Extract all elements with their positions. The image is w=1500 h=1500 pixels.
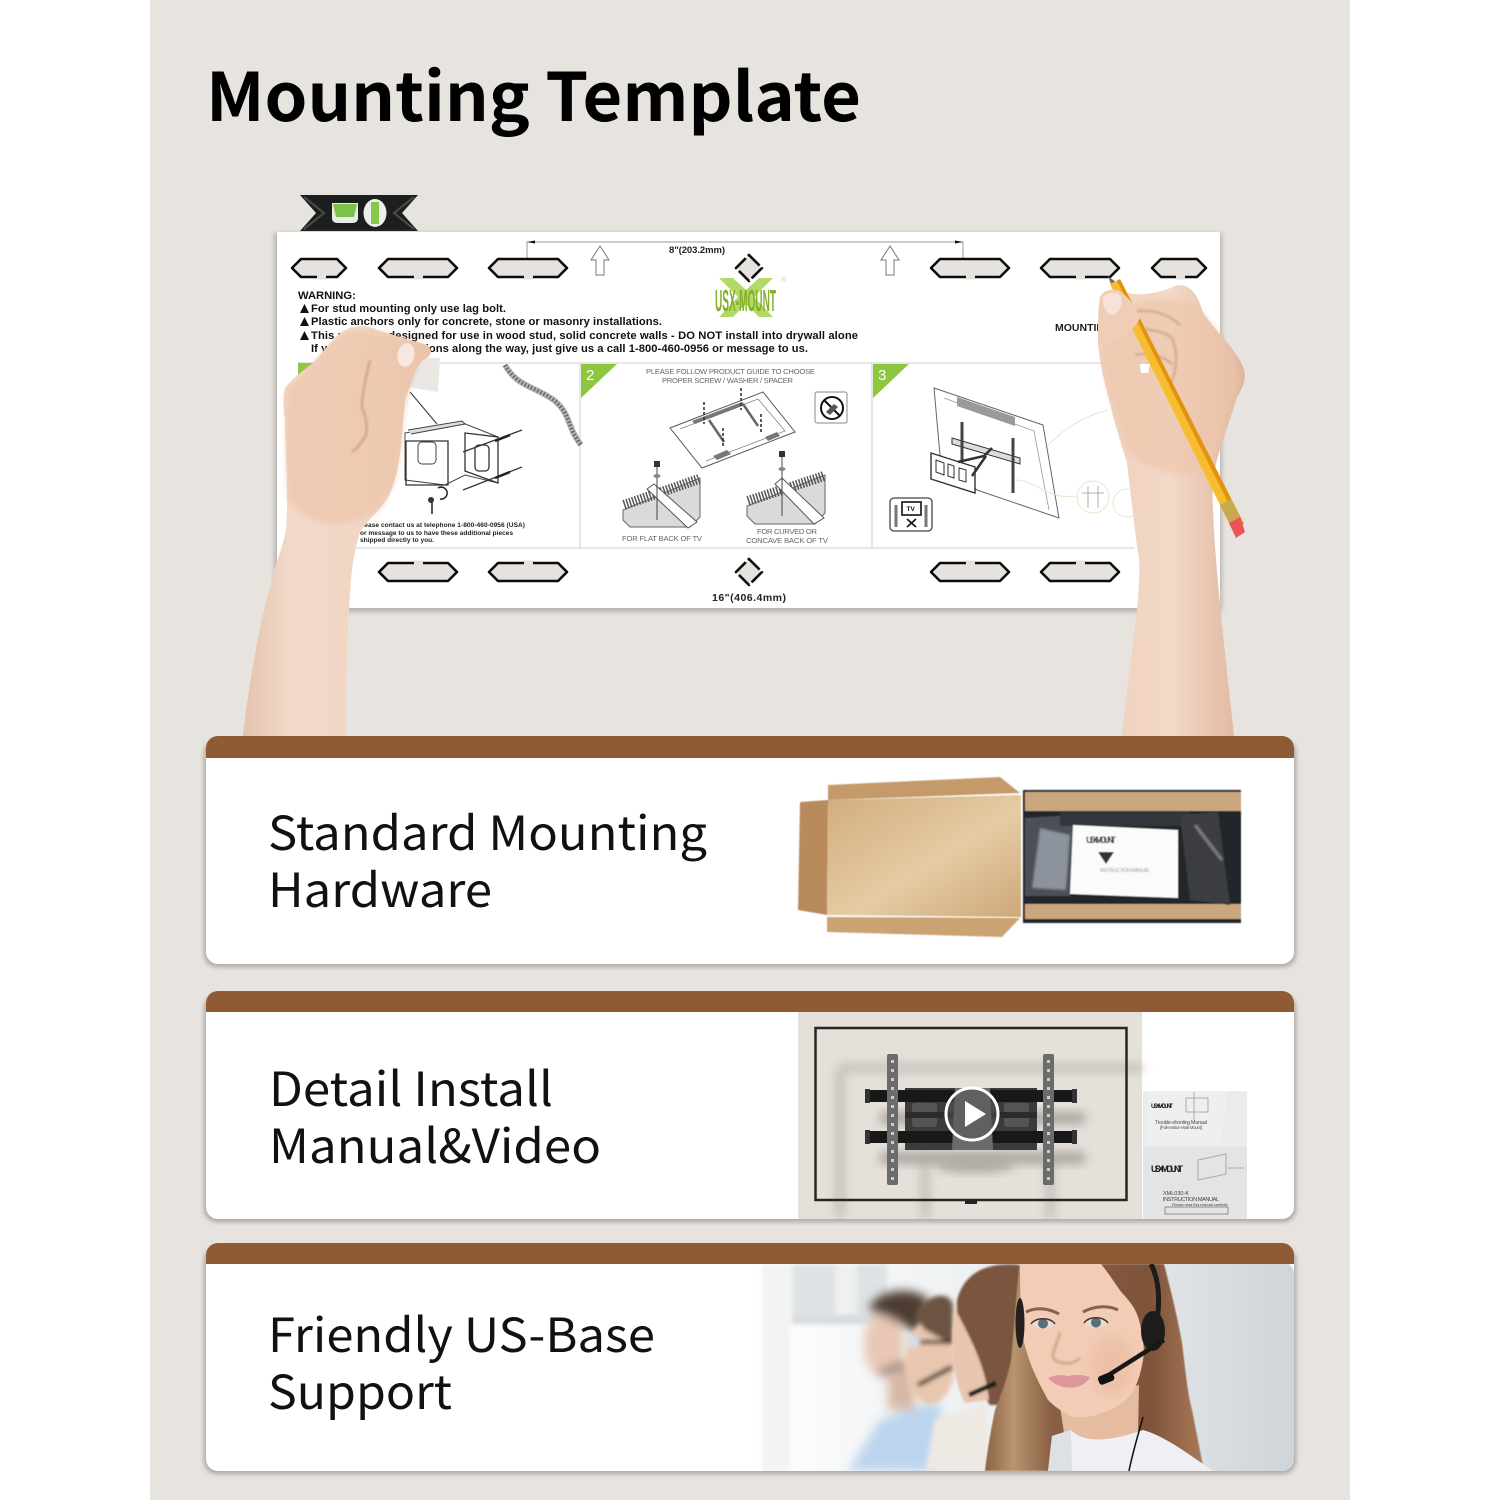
index fingernail	[1103, 292, 1122, 315]
step 2 badge: 2	[586, 367, 594, 384]
hand	[243, 326, 431, 736]
diamond holes	[736, 255, 762, 585]
top row of slots	[292, 259, 1206, 277]
panel: detail install manual and video	[204, 991, 1296, 1222]
manuals photo: Trouble-shooting Manual	[1155, 1120, 1207, 1126]
thumb nail	[395, 341, 417, 369]
card shadow	[204, 1247, 1296, 1474]
panel: standard mounting hardware	[204, 736, 1296, 967]
step 1: contact note: or message to us to have these additional pieces	[360, 530, 513, 537]
card text	[268, 795, 707, 921]
step 1: contact note: Please contact us at telephone 1-800-460-0956 (USA)	[358, 522, 525, 529]
manuals photo	[1143, 1091, 1247, 1219]
dimension line: 8 inch	[527, 240, 963, 258]
TV outline	[816, 1028, 1126, 1200]
card shadow	[204, 740, 1296, 967]
panel: mounting template sheet	[274, 232, 1222, 612]
sheet shadow	[274, 233, 1222, 612]
step 2 heading: PLEASE FOLLOW PRODUCT GUIDE TO CHOOSE	[646, 367, 815, 376]
title: Mounting Template	[206, 44, 861, 141]
page background panel	[150, 0, 1350, 1500]
left hand holding eraser	[243, 326, 440, 736]
photo: opened hardware box: USX-MOUNT	[1086, 835, 1116, 845]
manuals photo: [Full-motion Wall Mount]	[1160, 1125, 1202, 1130]
manuals photo: USX-MOUNT	[1151, 1103, 1173, 1110]
step 2 heading	[646, 367, 815, 385]
wall mount	[905, 1088, 1037, 1150]
instruction frame lines	[298, 363, 1135, 548]
warning text	[298, 290, 858, 355]
card header bar	[206, 1243, 1294, 1264]
warning text: WARNING:	[298, 290, 356, 302]
index finger over pencil	[1098, 290, 1140, 345]
icon: no power tools	[815, 392, 847, 423]
card text: Hardware	[268, 852, 492, 921]
hand crease shading	[352, 360, 370, 452]
step 2: curved back diagram	[746, 451, 829, 545]
blurred colleague two	[905, 1296, 990, 1471]
step 1: contact note	[358, 522, 525, 544]
pencil ferrule	[1220, 499, 1240, 523]
shirt	[1048, 1430, 1213, 1471]
card	[206, 991, 1294, 1219]
step 2: TV back diagram	[670, 388, 795, 468]
card header bar	[206, 991, 1294, 1012]
mounting label: MOUNTING	[1055, 322, 1112, 334]
bottom row of slots	[379, 563, 1119, 581]
blurred colleague one	[848, 1291, 945, 1471]
sheet	[277, 232, 1220, 608]
warning text: For stud mounting only use lag bolt.	[311, 303, 506, 315]
card text	[269, 1051, 601, 1177]
step 3 badge: 3	[878, 367, 886, 384]
step 1: contact note: shipped directly to you.	[360, 537, 434, 544]
right hand holding pencil	[1098, 279, 1245, 736]
pencil body	[1110, 279, 1244, 531]
photo: opened hardware box: INSTRUCTION MANUAL	[1100, 868, 1150, 874]
lips	[1048, 1375, 1090, 1388]
card text: Standard Mounting	[268, 795, 707, 864]
manuals photo: INSTRUCTION MANUAL	[1163, 1197, 1219, 1203]
nose	[1053, 1332, 1080, 1363]
step 2: flat back diagram: FOR FLAT BACK OF TV	[622, 534, 703, 543]
blurred office background	[762, 1264, 887, 1471]
step 2: curved back diagram: FOR CURVED OR	[757, 527, 818, 536]
wall shadow	[840, 1068, 1142, 1219]
play button	[946, 1088, 998, 1140]
icon: two-person lift	[890, 498, 932, 531]
logo: USX-MOUNT: ®	[781, 276, 787, 284]
16 inch dimension label: 16"(406.4mm)	[712, 592, 786, 604]
hand upper tone	[286, 330, 427, 524]
warning text: This mount is designed for use in wood stud, solid concrete walls - DO NOT install into drywall alone	[311, 330, 858, 342]
step 2: flat back diagram	[622, 461, 703, 543]
icon: bubble level	[300, 195, 418, 231]
icon: two-person lift: TV	[906, 506, 915, 513]
manuals photo: XML030-K	[1163, 1191, 1189, 1197]
neck	[1060, 1385, 1139, 1440]
step 2 badge	[581, 364, 617, 398]
video thumbnail	[798, 1012, 1142, 1219]
manuals photo: Please read this manual carefully	[1172, 1203, 1228, 1207]
support photo	[755, 1264, 1295, 1471]
card	[206, 1243, 1294, 1471]
card text: Manual&Video	[269, 1108, 601, 1177]
logo: USX-MOUNT	[715, 276, 787, 318]
pencil tip	[1108, 276, 1117, 287]
card text: Friendly US-Base	[268, 1297, 655, 1366]
eraser	[373, 355, 440, 392]
card	[206, 736, 1294, 964]
hand	[1098, 285, 1245, 736]
panel: friendly US-base support	[204, 1243, 1296, 1474]
photo: opened hardware box	[798, 777, 1241, 940]
step 2: curved back diagram: CONCAVE BACK OF TV	[746, 536, 829, 545]
card text: Support	[268, 1354, 452, 1423]
manuals photo: USX-MOUNT	[1151, 1164, 1184, 1174]
step 3 badge	[873, 364, 909, 398]
step 3: TV with arm diagram	[931, 388, 1141, 518]
eraser tip	[1229, 517, 1245, 538]
hand tone	[1102, 298, 1238, 474]
finger shading	[1133, 311, 1180, 388]
arrows up	[591, 246, 899, 275]
headset	[1016, 1264, 1165, 1471]
step 2 heading: PROPER SCREW / WASHER / SPACER	[662, 376, 794, 385]
cheek tone	[1092, 1338, 1132, 1392]
gap between fingers	[1140, 364, 1150, 373]
blurred colleague three	[952, 1264, 1020, 1405]
dimension line: 8 inch: 8"(203.2mm)	[669, 245, 725, 256]
hair	[985, 1264, 1204, 1471]
card shadow	[204, 995, 1296, 1222]
warning text: If you have any questions along the way, just give us a call 1-800-460-0956 or message to us.	[311, 343, 808, 355]
card text	[268, 1297, 655, 1423]
face	[1020, 1264, 1144, 1418]
warning text: Plastic anchors only for concrete, stone or masonry installations.	[311, 316, 662, 328]
step 1: wall plate illustration	[298, 363, 581, 514]
card text: Detail Install	[269, 1051, 553, 1120]
card header bar	[206, 736, 1294, 758]
panel: mounting template sheet: USX-MOUNT	[715, 283, 776, 318]
eyes and brows	[1026, 1307, 1118, 1328]
